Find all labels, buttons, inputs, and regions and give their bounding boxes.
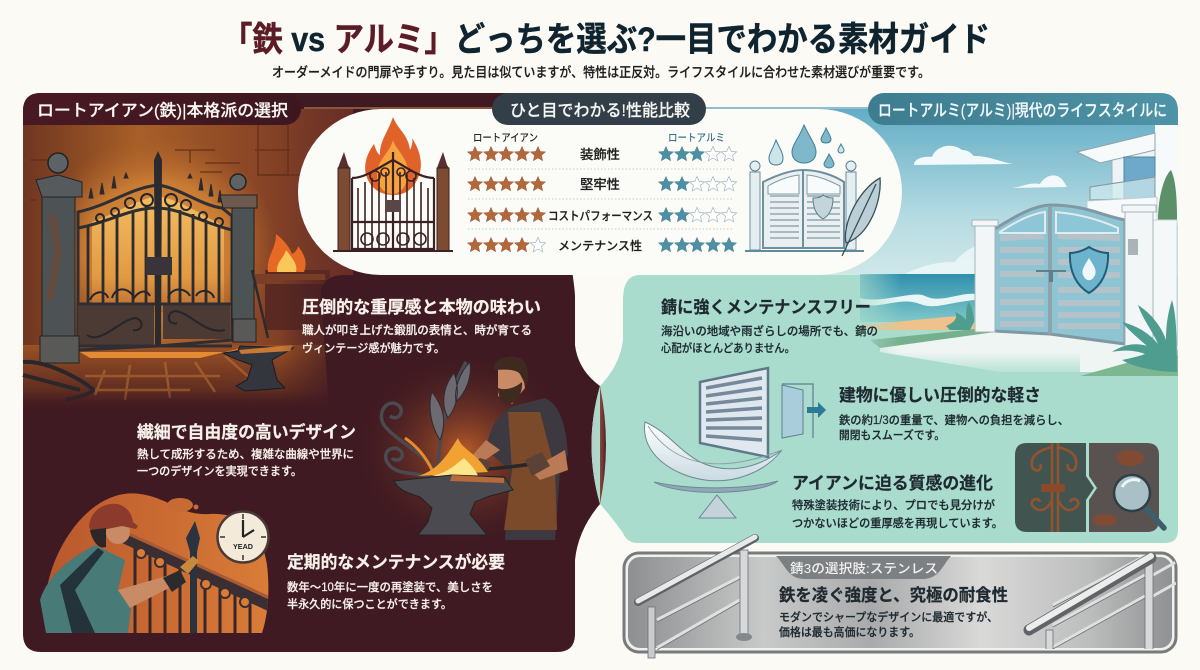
text: free design: 一つのデザインを実現できます。 (137, 464, 302, 478)
house (1077, 125, 1178, 355)
rows: star ratings: 装飾性 (580, 147, 620, 162)
header: aluminium (868, 93, 1178, 125)
heading: aluminium column: ロートアルミ (668, 132, 725, 144)
rows: star ratings: 堅牢性 (580, 177, 620, 192)
clock icon (218, 512, 268, 562)
text: texture: アイアンに迫る質感の進化 (792, 473, 993, 493)
heading: iron column: ロートアイアン (473, 132, 538, 144)
text: massive feel: ヴィンテージ感が魅力です。 (302, 341, 445, 355)
icon: magnifying glass (1114, 475, 1164, 528)
title: 「鉄 vs アルミ」どっちを選ぶ?一目でわかる素材ガイド (222, 21, 990, 59)
text: rust resistance: 心配がほとんどありません。 (661, 341, 795, 355)
text: stainless: モダンでシャープなデザインに最適ですが、 (779, 610, 998, 624)
text: texture: 特殊塗装技術により、プロでも見分けが (792, 498, 995, 512)
text: maintenance (287, 552, 505, 611)
text: rust resistance: 錆に強くメンテナンスフリー (661, 298, 871, 317)
illustration: left handrail (638, 537, 755, 658)
painter figure (40, 545, 132, 633)
text: texture (792, 473, 1003, 530)
gate post right (220, 174, 257, 342)
header: comparison (492, 93, 706, 125)
forge fire (268, 234, 306, 272)
header: wrought iron: ロートアイアン(鉄)|本格派の選択 (37, 101, 289, 120)
text: lightness: 建物に優しい圧倒的な軽さ (839, 386, 1041, 405)
forge scene illustration (23, 109, 368, 415)
text: massive feel: 職人が叩き上げた鍛肌の表情と、時が育てる (302, 323, 532, 337)
anvil (223, 346, 293, 391)
panel: aluminium (600, 109, 1178, 543)
header: wrought iron (23, 93, 301, 125)
text: free design (137, 422, 356, 478)
rows: star ratings: コストパフォーマンス (548, 209, 653, 223)
subtitle: オーダーメイドの門扉や手すり。見た目は似ていますが、特性は正反対。ライフスタイルに合わせた素材選びが重要です。 (272, 64, 930, 80)
pill: third option: 錆3の選択肢:ステンレス (790, 561, 938, 576)
text: lightness (839, 386, 1069, 442)
text: lightness: 開閉もスムーズです。 (839, 428, 945, 442)
text: rust resistance (661, 298, 878, 355)
dark card behind text (321, 275, 575, 420)
pill: third option (776, 556, 951, 579)
text: maintenance: 半永久的に保つことができます。 (287, 597, 452, 611)
text: massive feel: 圧倒的な重厚感と本物の味わい (302, 297, 541, 317)
panel: wrought iron (23, 93, 600, 652)
text: rust resistance: 海沿いの地域や雨ざらしの場所でも、錆の (661, 324, 878, 338)
illustration: right handrail (1029, 556, 1176, 652)
feather on stand (645, 422, 782, 518)
text: stainless: 鉄を凌ぐ強度と、究極の耐食性 (779, 586, 1008, 605)
center lens joint (592, 386, 606, 504)
panel: stainless option (624, 537, 1176, 658)
text: massive feel (302, 297, 541, 355)
text: texture: つかないほどの重厚感を再現しています。 (792, 516, 1003, 530)
text: free design: 熱して成形するため、複雑な曲線や世界に (137, 447, 354, 461)
anvil (394, 475, 513, 535)
clouds (905, 146, 1067, 274)
illustration: iron texture comparison (1015, 443, 1164, 532)
text: maintenance: 定期的なメンテナンスが必要 (287, 552, 505, 572)
header: comparison: ひと目でわかる!性能比較 (510, 101, 690, 120)
text: stainless (779, 586, 1008, 639)
feather scrollwork (381, 362, 470, 480)
tools on floor (23, 362, 93, 400)
plants (946, 300, 1177, 372)
icon: door with arrow (782, 384, 826, 438)
aluminium gate (972, 205, 1156, 346)
clock icon: YEAD (233, 542, 254, 551)
shield icon (1070, 247, 1108, 293)
gate post left (36, 153, 82, 363)
panel: performance comparison (298, 109, 902, 275)
smith body (486, 398, 568, 540)
seaside scene illustration (810, 109, 1178, 378)
iron gate (78, 151, 232, 350)
connector lines (304, 107, 492, 109)
icon: iron gate with flame (333, 117, 453, 251)
text: free design: 繊細で自由度の高いデザイン (137, 422, 356, 442)
icon: aluminium gate with drops and feather (745, 125, 880, 256)
illustration: blacksmith at anvil (350, 350, 580, 550)
text: stainless: 価格は最も高価になります。 (779, 625, 920, 639)
illustration: light panel and feather (645, 368, 826, 518)
text: maintenance: 数年〜10年に一度の再塗装で、美しさを (287, 580, 493, 594)
rows: star ratings: メンテナンス性 (558, 239, 642, 253)
flame on anvil (418, 438, 488, 476)
text: lightness: 鉄の約1/3の重量で、建物への負担を減らし、 (839, 413, 1069, 427)
illustration: painter at railing (40, 493, 270, 633)
rows: star ratings (467, 146, 737, 253)
